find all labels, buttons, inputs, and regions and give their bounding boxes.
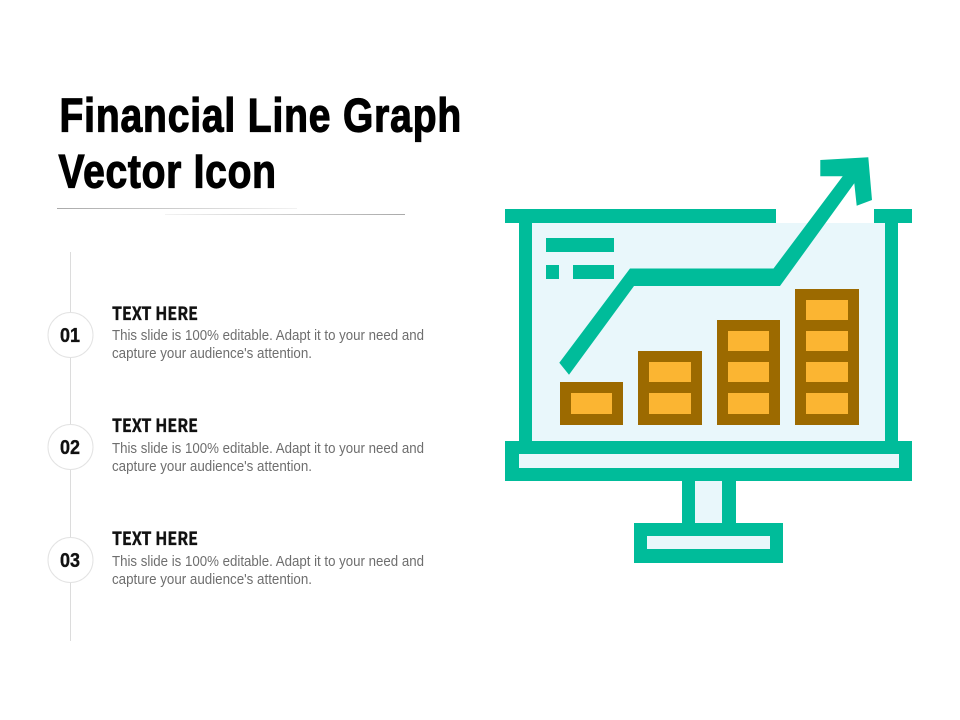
title	[58, 90, 461, 198]
monitor base	[505, 441, 912, 563]
step 02	[48, 412, 424, 475]
step 03: capture your audience's attention.	[112, 572, 312, 588]
title: Vector Icon	[58, 146, 276, 198]
title: Financial Line Graph	[60, 90, 461, 142]
step 03: TEXT HERE	[112, 525, 198, 551]
step 03: This slide is 100% editable. Adapt it to your need and	[112, 554, 424, 570]
icon: monitor with financial line graph	[505, 157, 912, 563]
step 03: 03	[60, 550, 80, 572]
step 02: capture your audience's attention.	[112, 459, 312, 475]
monitor frame	[505, 209, 912, 441]
step 01	[48, 300, 424, 362]
step 01: TEXT HERE	[112, 300, 198, 326]
timeline	[48, 252, 424, 641]
step 03	[48, 525, 424, 588]
screen background	[532, 223, 885, 441]
text placeholder lines	[546, 238, 614, 279]
step 02: This slide is 100% editable. Adapt it to your need and	[112, 441, 424, 457]
step 01: capture your audience's attention.	[112, 346, 312, 362]
step 01: 01	[60, 325, 80, 347]
arrow: rising trend line	[559, 157, 872, 375]
step 01: This slide is 100% editable. Adapt it to your need and	[112, 328, 424, 344]
bar chart	[560, 289, 859, 425]
step 02: 02	[60, 437, 80, 459]
step 02: TEXT HERE	[112, 412, 198, 438]
